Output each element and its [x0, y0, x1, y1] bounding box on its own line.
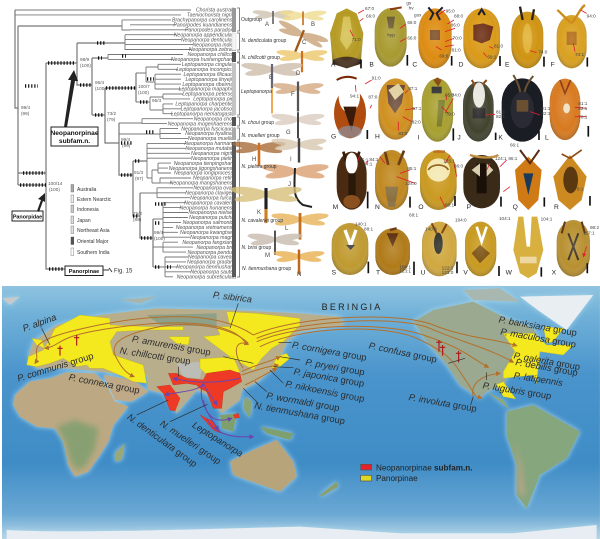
map group labels: P. cornigera group: [291, 340, 367, 363]
taxon names: Neopanorpa ovata: [193, 186, 236, 192]
character state labels: 94:0: [587, 13, 596, 18]
character state labels: 123:0: [442, 270, 454, 275]
map group labels: P. confusa group: [368, 341, 438, 365]
taxon names: Leptopanorpa filicauda: [184, 72, 236, 78]
support values: (99): [122, 143, 131, 148]
icon: insect L: [271, 212, 329, 240]
fossil markers: [57, 335, 461, 362]
taxon names: Neopanorpa sauteri: [190, 270, 237, 276]
character state labels: 104:0: [455, 218, 467, 223]
panel letters: F: [551, 62, 555, 69]
map group labels: P. maculosa group: [500, 326, 577, 350]
taxon names: Neopanorpa indica: [192, 42, 236, 48]
support values: (79): [107, 117, 116, 122]
panel letters: R: [554, 204, 559, 211]
character state labels: 94:1: [350, 94, 359, 99]
photo U: [422, 222, 457, 276]
Neopanorpinae distribution: [157, 370, 242, 433]
distribution bars and brackets: [232, 8, 240, 277]
character state labels: 82:1: [496, 114, 505, 119]
map group labels: P. galerita group: [513, 350, 581, 372]
map group labels: P. debilis group: [515, 357, 578, 378]
character state labels: 80:1: [445, 203, 454, 208]
icon: insect J: [261, 163, 329, 207]
photo N: [375, 150, 408, 210]
support values: (89): [133, 217, 142, 222]
insect letters: F: [291, 92, 295, 98]
arrow: to Panorpidae node: [37, 193, 45, 212]
photo O: [420, 150, 457, 210]
taxon names: Neopanorpa tienmushana: [176, 265, 236, 271]
taxon names: Neopanorpa hunanensis: [179, 205, 236, 211]
panel letters: G: [331, 134, 336, 141]
taxon names: Neopanorpa vietnamensis: [176, 225, 236, 231]
character state labels: 66:0: [407, 20, 417, 25]
panel letters: [331, 62, 559, 277]
character state labels: 66:1: [510, 143, 519, 148]
taxon names: Brachypanorpa carolinensis: [172, 18, 236, 24]
vegetation tones: [57, 420, 525, 498]
character state labels: 86:1: [508, 156, 518, 161]
icon: insect E: [241, 62, 303, 114]
photo D: [463, 8, 500, 68]
support values: 100/7: [138, 84, 150, 89]
map group labels: N. denticulata group: [125, 412, 199, 469]
taxon names: Leptopanorpa incompicua: [176, 67, 236, 73]
taxon names: Neopanorpa fuscicauda: [181, 126, 236, 132]
panel letters: A: [331, 62, 336, 69]
taxon names: Neopanorpa salmonica: [183, 220, 236, 226]
map group labels: P. sibirica: [212, 290, 253, 304]
taxon names: Neopanorpa subreticulata: [177, 274, 236, 280]
panel letters: M: [333, 204, 338, 211]
character state labels: 81:1: [541, 106, 551, 111]
group labels: N. choui group: [242, 120, 274, 126]
taxon names: Neopanorpa denticulata: [181, 37, 236, 43]
character state labels: 98:2: [590, 225, 599, 230]
taxon names: Neopanorpa nigritis: [191, 151, 236, 157]
taxon names: Leptopanorpa cingulata: [182, 62, 236, 68]
photo K: [502, 75, 543, 142]
taxon names: Chorista australis: [196, 8, 236, 14]
character state labels: 104:1: [499, 216, 511, 221]
taxon names: Neopanorpa mangshanensis: [170, 181, 236, 187]
taxon names: Neopanorpa mutabilis: [186, 146, 236, 152]
taxon names: Leptopanorpa pieli: [193, 97, 237, 103]
icon: insect A: [252, 9, 294, 24]
map group labels: N. muelleri group: [158, 418, 223, 466]
character state labels: 82:1: [541, 111, 551, 116]
map legend: Neopanorpinae subfam.n.: [376, 463, 473, 472]
legend: biogeographic regions: Estern Nearctic: [77, 197, 112, 203]
taxon names: Neopanorpa muelleri: [188, 136, 237, 142]
photo S: [332, 223, 368, 275]
taxon names: Neopanorpa nielseni: [188, 210, 237, 216]
panel letters: O: [418, 204, 424, 211]
character state labels: 83:0: [398, 131, 408, 136]
map group labels: P. wormaldi group: [266, 390, 340, 413]
group labels: N. brisi group: [242, 245, 271, 251]
photo B: [375, 7, 407, 67]
legend: biogeographic regions: Australia: [77, 187, 97, 193]
group labels: Leptopanorpa: [241, 89, 272, 95]
icon: insect N: [273, 250, 325, 274]
legend: biogeographic regions: Oriental Major: [77, 239, 109, 245]
callout: Neopanorpinae subfam.n.: [50, 127, 99, 146]
insect letters: I: [290, 157, 292, 163]
support values: (99): [21, 111, 30, 116]
taxon names: Neopanorpa retina: [193, 176, 236, 182]
taxon names: Leptopanorpa linyejiei: [186, 77, 237, 83]
panel letters: V: [463, 270, 468, 277]
group labels: N. cavaleriei group: [242, 218, 283, 224]
callout: Neopanorpinae subfam.n.: subfam.n.: [59, 138, 90, 145]
character state labels: 85:0: [445, 93, 454, 98]
legend: biogeographic regions: Southern India: [77, 250, 110, 256]
character state labels: hyp: [387, 33, 395, 38]
character state labels: 122:1: [442, 265, 454, 270]
Panorpinae distribution: [27, 312, 573, 399]
photo I: [422, 77, 453, 142]
support values: 96/4: [95, 80, 105, 85]
character state labels: 125:1: [443, 158, 455, 163]
taxon names: Neopanorpa brisi: [196, 245, 237, 251]
panel: adult insects and group labels: [230, 9, 330, 278]
dispersal arrows: Neopanorpinae: [165, 378, 253, 437]
character state labels: [350, 1, 599, 275]
map legend: [361, 463, 473, 483]
taxon names: Neopanorpa chillcotti: [188, 52, 237, 58]
character state labels: 87:0: [368, 94, 378, 99]
character state labels: hv: [409, 5, 414, 10]
callout: Panorpinae: Panorpinae: [69, 269, 99, 275]
taxon names: Neopanorpa tienpingshana: [174, 161, 236, 167]
arrow: to Neopanorpinae node: [64, 70, 78, 127]
taxon names: Neopanorpa harmandi: [184, 141, 237, 147]
taxon names: Leptopanorpa ribeirnae: [182, 82, 236, 88]
panel letters: S: [332, 270, 337, 277]
panel letters: D: [459, 62, 464, 69]
map group labels: P. amurensis group: [131, 334, 212, 357]
map group labels: P. nikkoensis group: [285, 379, 365, 404]
character state labels: 67:1: [412, 106, 422, 111]
taxon names: Neopanorpa jigongshanensis: [169, 166, 236, 172]
panel letters: W: [506, 270, 513, 277]
callout: Panorpidae: Panorpidae: [13, 214, 42, 220]
panel letters: T: [376, 270, 380, 277]
taxon names: Neopanorpa appendiculata: [174, 32, 236, 38]
icon: insect K: [230, 185, 302, 223]
character state labels: 66:0: [407, 35, 417, 40]
insect letters: N: [297, 272, 301, 278]
character state labels: 74:0: [538, 49, 548, 54]
map group labels: P. lugubris group: [482, 380, 552, 401]
support values: 91/3: [134, 170, 144, 175]
map legend: Panorpinae: [376, 474, 418, 483]
panel letters: X: [552, 270, 557, 277]
insect letters: J: [288, 182, 291, 188]
map group labels: P. involuta group: [408, 392, 477, 414]
photo T: [375, 228, 410, 275]
taxon names: Neopanorpa choui: [194, 116, 237, 122]
character state labels: 86:0: [454, 163, 463, 168]
character state labels: 81:1: [496, 109, 505, 114]
insect letters: M: [265, 253, 270, 259]
panel letters: P: [467, 204, 472, 211]
character state labels: 123:1: [399, 269, 411, 274]
support values: (100): [80, 63, 91, 68]
character state labels: 87:1: [408, 86, 418, 91]
taxon names: Neopanorpa gradana: [187, 260, 236, 266]
leader lines: [42, 303, 487, 422]
support values: 73/2: [107, 111, 117, 116]
taxon names: Neopanorpa furcata: [190, 195, 236, 201]
photo X: [557, 220, 590, 277]
callout: Panorpinae: Fig. 15: [114, 268, 133, 274]
taxon names: Neopanorpa clavigera: [185, 190, 236, 196]
photo A: [330, 8, 363, 68]
map group labels: P. connexa group: [68, 372, 140, 396]
panel letters: J: [457, 134, 461, 141]
icon: insect M: [247, 231, 303, 255]
callout: Panorpinae: [65, 266, 133, 276]
panel letters: U: [421, 270, 426, 277]
photo Q: [515, 150, 542, 210]
insect letters: K: [257, 210, 261, 216]
map group labels: P. banksiana group: [498, 314, 578, 338]
icon: insect C: [270, 18, 330, 62]
insect letters: C: [302, 40, 307, 46]
insect letters: B: [311, 22, 315, 28]
support values: (97): [135, 176, 144, 181]
character state labels: 88:1: [364, 227, 373, 232]
group labels: [241, 17, 291, 272]
green Siberia and grey Tibet tones: [147, 313, 217, 327]
character state labels: 69:0: [439, 54, 449, 59]
support values: 76/2: [133, 211, 143, 216]
taxon names: Panorpodes paradoxa: [185, 28, 236, 34]
legend: biogeographic regions: Northeast Asia: [77, 228, 110, 234]
photo L: [550, 79, 580, 140]
group labels: N. pielina group: [242, 164, 277, 170]
character state labels: 85:1: [407, 166, 417, 171]
panel letters: K: [498, 134, 503, 141]
taxon names: Neopanorpa longiprocessa: [174, 171, 236, 177]
character state labels: 66:0: [366, 14, 375, 19]
panel: world map: [2, 286, 600, 539]
support values: 99/4: [21, 105, 31, 110]
taxon names: Neopanorpa hyalinata: [185, 131, 236, 137]
taxon names: Leptopanorpa jacobsoni: [181, 106, 237, 112]
icon: insect I: [271, 137, 327, 163]
character state labels: 95:0: [446, 8, 455, 13]
panel letters: C: [412, 62, 417, 69]
character state labels: 88:0: [454, 13, 463, 18]
character state labels: 81:0: [494, 44, 503, 49]
taxon names: Neopanorpa magna: [190, 235, 236, 241]
character state labels: 91:0: [372, 75, 381, 80]
insect letters: D: [296, 71, 301, 77]
photo R: [553, 150, 587, 210]
icon: insect H: [232, 141, 286, 166]
panel letters: L: [545, 134, 549, 141]
photo P: [463, 155, 500, 208]
character state labels: 74:1: [575, 52, 584, 57]
character state labels: 69:1: [487, 54, 497, 59]
taxon names: Panorpodes kuandianensis: [173, 22, 236, 28]
taxon names: Taeniochorista nigrita: [187, 13, 236, 19]
taxon names: Neopanorpa hushengchangi: [171, 57, 237, 63]
photo V: [465, 222, 496, 276]
taxon names: Leptopanorpa nematogaster: [171, 111, 236, 117]
continents: [2, 288, 597, 539]
insect letters: G: [286, 130, 291, 136]
panel letters: Q: [513, 204, 518, 211]
taxon names: Neopanorpa pulchra: [189, 215, 236, 221]
photo C: [418, 7, 452, 68]
photo F: [557, 5, 587, 68]
support values: 99/4: [121, 137, 131, 142]
map group labels: N. tienmushana group: [254, 400, 346, 426]
insect letters: E: [269, 75, 273, 81]
character state labels: 67:0: [365, 6, 374, 11]
panel: phylogenetic tree: [12, 8, 240, 280]
photo J: [463, 80, 494, 142]
photo E: [511, 7, 543, 68]
red character arrows: [350, 10, 587, 257]
panel letters: N: [375, 204, 380, 211]
legend: biogeographic regions: [71, 184, 112, 256]
character state labels: gs: [406, 1, 412, 6]
taxon names: Neopanorpa pielina: [191, 156, 236, 162]
insect letters: H: [252, 157, 256, 163]
character state labels: 124:1: [495, 156, 507, 161]
icon: insect B: [279, 9, 327, 25]
character state labels: 140:0: [425, 227, 437, 232]
character state labels: 124:0: [405, 181, 417, 186]
panel letters: B: [369, 62, 374, 69]
tree branches: [15, 10, 193, 277]
character state labels: 81:0: [452, 48, 461, 53]
character state labels: 71:0: [352, 37, 361, 42]
insect letters: A: [265, 22, 269, 28]
character state labels: 108:1: [399, 264, 411, 269]
taxon names: Neopanorpa cavaleriei: [184, 200, 237, 206]
photo W: [513, 217, 543, 278]
taxon names: Leptopanorpa charpentieri: [175, 102, 237, 108]
character state labels: 140:1: [355, 221, 367, 226]
support values: [21, 57, 165, 241]
character state labels: 84:1: [363, 162, 373, 167]
taxon names: Leptopanorpa petersen: [182, 92, 236, 98]
map group labels: P. latipennis: [513, 370, 564, 388]
support values: (100): [154, 236, 165, 241]
panel letters: E: [505, 62, 510, 69]
map group labels: [16, 290, 581, 469]
map group labels: P. japonica group: [293, 366, 365, 389]
photo H: [378, 78, 413, 140]
legend: biogeographic regions: Japan: [77, 218, 91, 224]
label: BERINGIA: BERINGIA: [322, 302, 380, 312]
icon: insect D: [276, 49, 328, 72]
character state labels: 68:1: [409, 213, 418, 218]
taxon names: Neopanorpa pendula: [188, 250, 236, 256]
support values: (100): [49, 187, 60, 192]
character state labels: 81:1: [578, 101, 588, 106]
ocean background: [2, 286, 600, 539]
character state labels: gox: [414, 13, 422, 18]
character state labels: 70:1: [578, 114, 588, 119]
character state labels: 86:0: [451, 23, 460, 28]
taxon names: Neopanorpa fangxiangi: [182, 240, 237, 246]
map group labels: Leptopanorpa: [191, 420, 245, 459]
character state labels: 79:1: [574, 187, 584, 192]
group labels: N. denticulata group: [242, 38, 286, 44]
taxon names: Neopanorpa zebrata: [189, 47, 236, 53]
support values: 99/4: [154, 230, 164, 235]
panel letters: I: [417, 134, 419, 141]
insect letters: [252, 22, 315, 278]
group labels: Outgroup: [241, 17, 262, 23]
character state labels: 82:1: [578, 106, 588, 111]
map group labels: P. communis group: [16, 351, 95, 384]
taxon names: Neopanorpa caveata: [188, 255, 236, 261]
icon: insect F: [272, 82, 324, 112]
dispersal arrows: Panorpinae: [35, 317, 517, 398]
support values: (100): [95, 86, 106, 91]
panel letters: H: [375, 134, 380, 141]
scale bars: [361, 55, 590, 277]
character state labels: 84:0: [452, 93, 461, 98]
photo M: [337, 152, 367, 210]
taxon names: [168, 8, 237, 280]
support values: 100/14: [48, 181, 63, 186]
character state labels: 104:1: [541, 217, 553, 222]
taxon names: Neopanorpa kwangtsehi: [180, 230, 237, 236]
node character marks: [20, 43, 171, 269]
support values: 98/9: [80, 57, 90, 62]
support values: (100): [138, 90, 149, 95]
icon: insect G: [271, 112, 325, 138]
photo G: [334, 77, 366, 138]
callout: Panorpidae: [12, 211, 43, 221]
character state labels: 85:1: [359, 158, 369, 163]
character state labels: 79:0: [446, 112, 455, 117]
group labels: N. chillcotti group: [242, 55, 280, 61]
support values: 95/3: [152, 98, 162, 103]
character state labels: 70:0: [453, 35, 462, 40]
callout: Neopanorpinae subfam.n.: Neopanorpinae: [50, 130, 99, 137]
character state labels: 84:1: [369, 157, 379, 162]
character state labels: 117:1: [583, 230, 595, 235]
taxon names: Leptopanorpa mapaphila: [179, 87, 236, 93]
map group labels: P. pryeri group: [305, 357, 365, 377]
legend: biogeographic regions: Indonesia: [77, 207, 99, 213]
taxon names: Neopanorpa mogenhaerensis: [168, 121, 236, 127]
map group labels: P. alpina: [21, 312, 58, 334]
panel: male genitalia photo plates: [330, 1, 599, 278]
map group labels: N. chillcotti group: [119, 345, 191, 366]
character state labels: 82:0: [412, 119, 421, 124]
group labels: N. muelleri group: [242, 133, 280, 139]
group labels: N. tienmushana group: [242, 266, 291, 272]
insect letters: L: [285, 226, 289, 232]
